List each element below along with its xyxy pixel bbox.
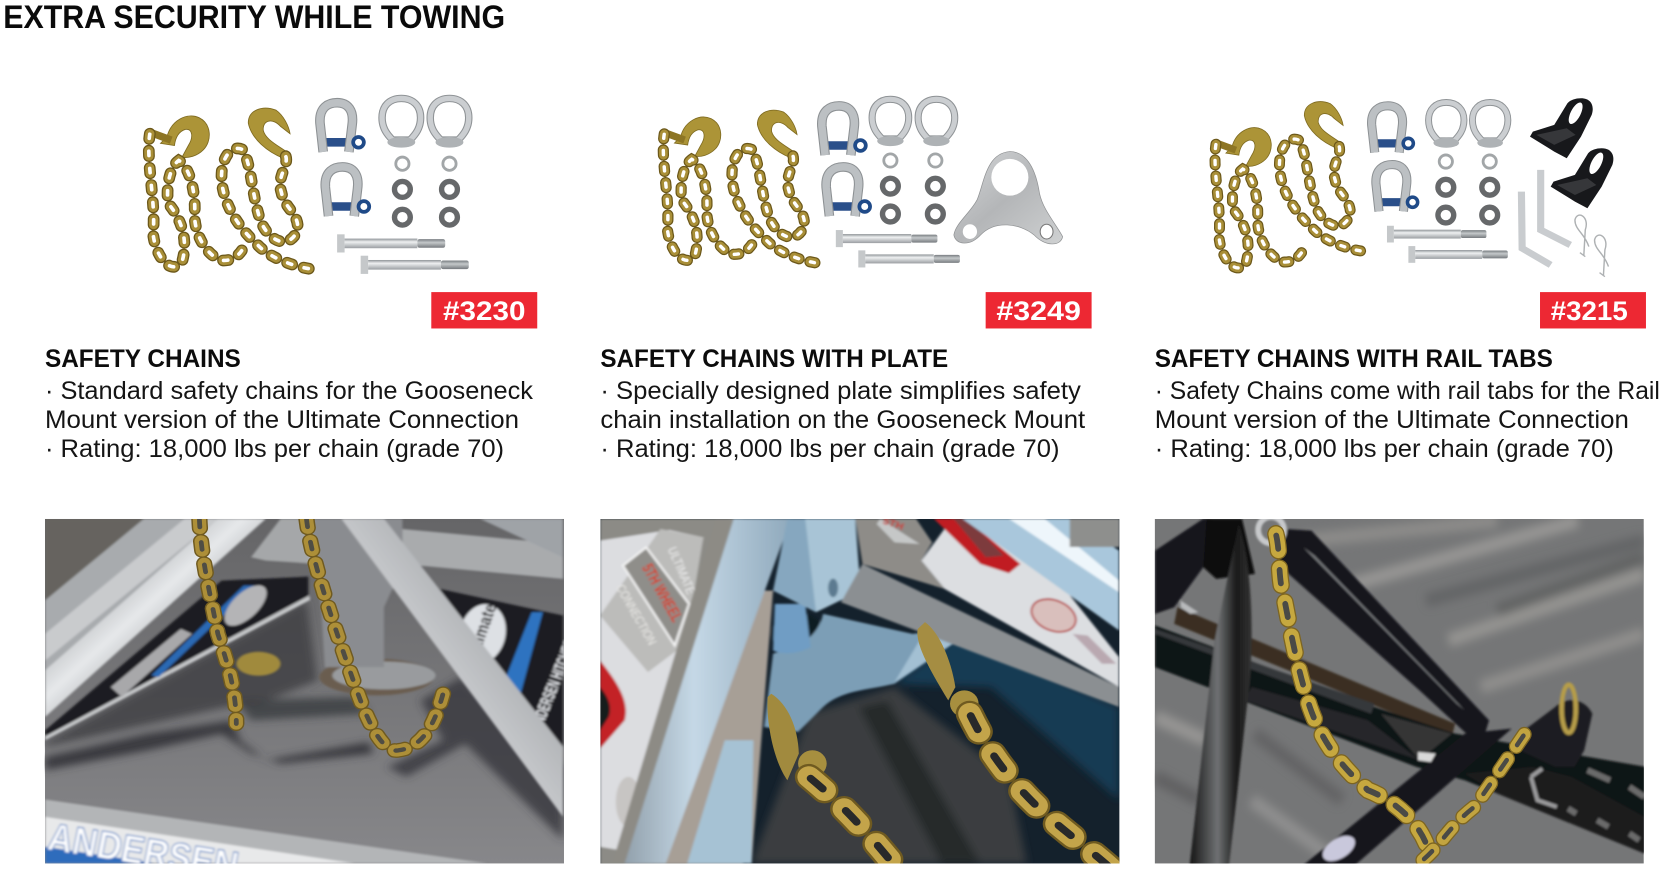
- product heading: SAFETY CHAINS: [45, 346, 241, 373]
- photo: chains on gooseneck mount: [45, 519, 580, 872]
- panel: safety chains: [45, 98, 580, 872]
- part number badge: #3230: [443, 296, 525, 326]
- photo: chains attached to plate: ULTIMATE: [665, 545, 698, 596]
- product description: Mount version of the Ultimate Connection: [1155, 406, 1629, 434]
- product kit: chains, shackles, eye bolts, washers, bolts, rail tabs, pins, clips: [1215, 98, 1613, 277]
- photo: chains attached to plate: CONNECTION: [613, 582, 659, 647]
- photo: chains attached to plate: [600, 516, 1120, 870]
- photo: chains attached to plate: 5TH: [881, 516, 905, 533]
- product heading: SAFETY CHAINS WITH RAIL TABS: [1155, 346, 1553, 373]
- photo: chains on gooseneck mount: timate: [467, 602, 501, 648]
- icon: mounting plate: [954, 152, 1063, 244]
- photo: chains on rail mount: [1155, 517, 1646, 866]
- product description: · Safety Chains come with rail tabs for the Rail: [1155, 377, 1660, 405]
- part number badge: #3249: [996, 296, 1081, 326]
- photo: chains attached to plate: 5TH WHEEL: [638, 561, 685, 625]
- photo: chains on gooseneck mount: ANDERSEN HITCHES: [527, 638, 580, 732]
- product description: [1155, 377, 1660, 463]
- product description: [45, 377, 533, 463]
- product description: · Standard safety chains for the Gooseneck: [45, 377, 533, 405]
- product description: chain installation on the Gooseneck Mount: [600, 406, 1085, 434]
- product kit: chains, shackles, eye bolts, washers, bolts, plate: [663, 99, 1063, 267]
- product description: Mount version of the Ultimate Connection: [45, 406, 519, 434]
- product kit: chains, shackles, eye bolts, washers, bolts: [149, 98, 469, 274]
- product heading: SAFETY CHAINS WITH PLATE: [600, 346, 948, 373]
- product description: [600, 377, 1085, 463]
- icon: rail tabs, pins and clips: [1521, 98, 1613, 277]
- part number badge: #3215: [1551, 296, 1628, 326]
- part number badge: [431, 292, 537, 328]
- panel: safety chains with rail tabs: [1155, 98, 1660, 866]
- product description: · Specially designed plate simplifies safety: [600, 377, 1081, 405]
- product description: · Rating: 18,000 lbs per chain (grade 70): [1155, 435, 1614, 463]
- product description: · Rating: 18,000 lbs per chain (grade 70): [45, 435, 504, 463]
- panel: safety chains with plate: [600, 99, 1120, 870]
- part number badge: [986, 292, 1092, 328]
- product description: · Rating: 18,000 lbs per chain (grade 70): [600, 435, 1059, 463]
- part number badge: [1540, 292, 1646, 328]
